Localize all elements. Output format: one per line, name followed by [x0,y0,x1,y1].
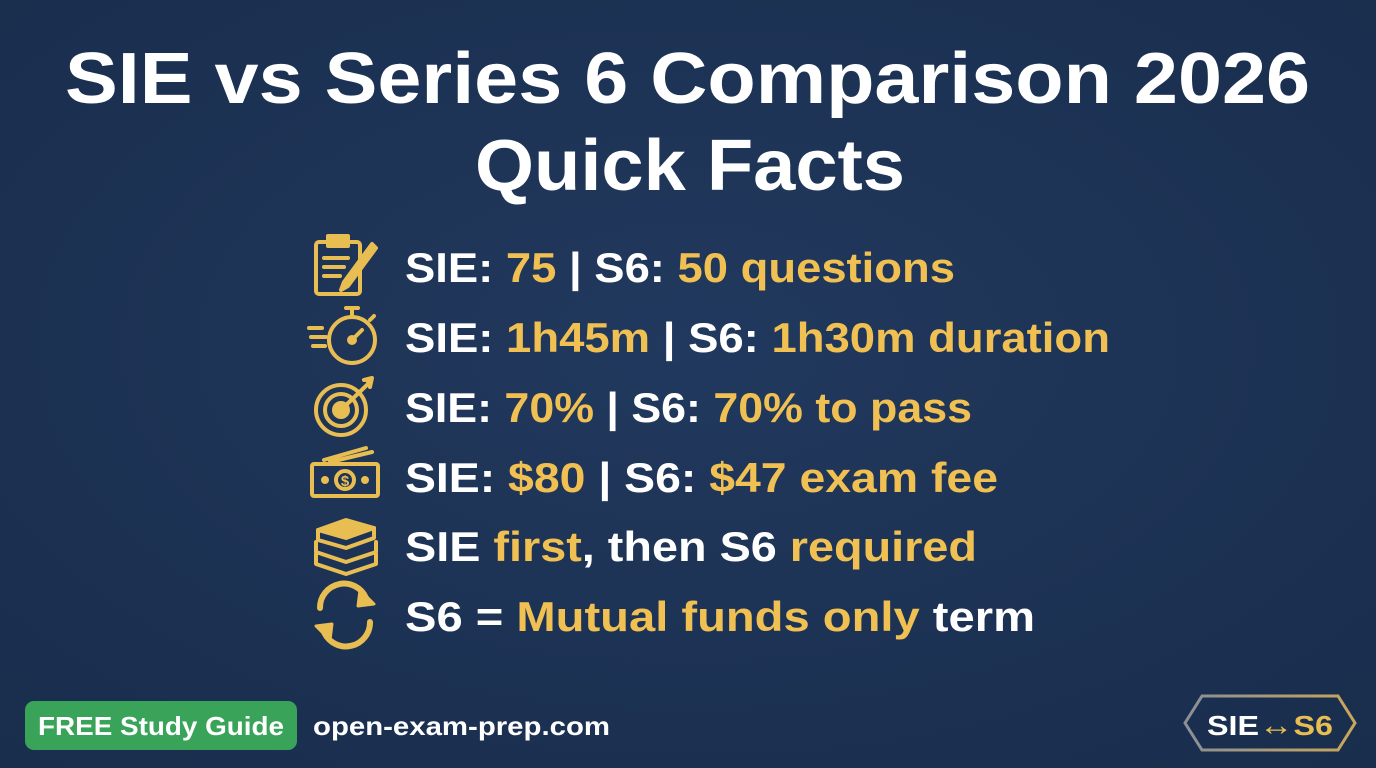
badge: free study guide: FREE Study Guide [38,711,284,741]
website url: open-exam-prep.com [313,711,610,741]
fact: passing score: SIE: 70% | S6: 70% to pass [405,384,972,432]
fact: fee: SIE: $80 | S6: $47 exam fee [405,454,998,502]
icons [309,236,378,646]
fact: questions: SIE: 75 | S6: 50 questions [405,244,955,292]
title: SIE vs Series 6 Comparison 2026 [65,39,1310,119]
badge: free study guide [25,701,297,750]
title: Quick Facts [475,126,905,206]
icon: money: $ [341,473,350,490]
icon: money [312,448,378,496]
icon: stopwatch [309,308,375,363]
icon: target [316,378,372,435]
icon: clipboard [316,236,376,294]
fact: duration: SIE: 1h45m | S6: 1h30m duration [405,314,1110,362]
icon: books [316,520,376,574]
icon: refresh arrows [316,584,374,646]
title [65,39,1310,206]
logo: SIE to S6: SIE↔S6 [1207,709,1333,742]
fact: order: SIE first, then S6 required [405,523,977,570]
fact: term: S6 = Mutual funds only term [405,593,1035,640]
logo: SIE to S6 [1185,696,1355,750]
fact list [405,244,1110,640]
